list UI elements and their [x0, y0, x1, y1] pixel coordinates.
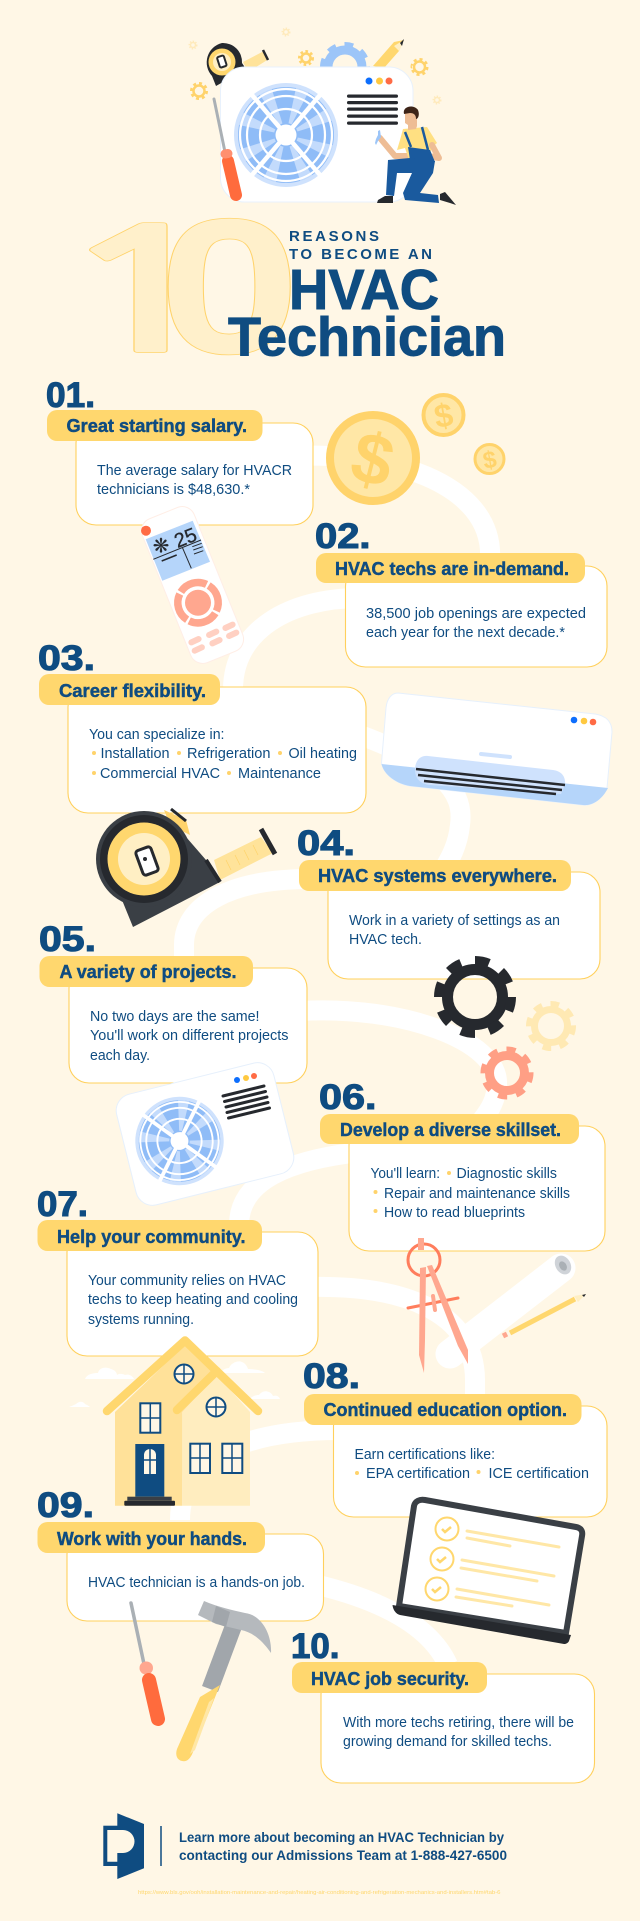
panel: reason 03: You can specialize in:	[89, 726, 224, 743]
icon: large tape measure	[96, 809, 275, 927]
icon: hammer	[176, 1601, 271, 1761]
source url: https://www.bls.gov/ooh/installation-maintenance-and-repair/heating-air-conditioning-and-refrigeration-mechanics-and-installers.htm#tab-6	[138, 1890, 500, 1896]
icon: fan	[234, 83, 338, 187]
panel: reason 02: 38,500 job openings are expected	[366, 605, 586, 622]
panel: reason 08	[303, 1357, 607, 1517]
panel: reason 06: 06.	[319, 1078, 376, 1117]
panel: reason 06: How to read blueprints	[384, 1204, 525, 1221]
panel: reason 05: No two days are the same!	[90, 1008, 260, 1025]
icon: coins: $	[481, 446, 499, 475]
panel: reason 04: HVAC tech.	[349, 931, 422, 948]
panel: reason 05: A variety of projects.	[60, 961, 236, 982]
icon: gears	[439, 961, 573, 1096]
icon: drafting compass	[408, 1238, 468, 1373]
panel: reason 05	[39, 920, 307, 1083]
footer call to action: Learn more about becoming an HVAC Technician by	[179, 1829, 504, 1845]
panel: reason 08: Earn certifications like:	[354, 1446, 495, 1463]
panel: reason 10	[291, 1627, 594, 1783]
panel: reason 04: 04.	[297, 824, 355, 863]
panel: reason 04: Work in a variety of settings as an	[349, 912, 560, 929]
icon: laptop checklist	[392, 1500, 582, 1644]
icon: coins	[330, 395, 504, 504]
title: big 10	[50, 179, 301, 395]
panel: reason 03: Oil heating	[288, 745, 357, 762]
panel: reason 08: EPA certification	[366, 1465, 470, 1482]
panel: reason 01: Great starting salary.	[66, 415, 247, 436]
panel: reason 07: techs to keep heating and cooling	[88, 1291, 298, 1308]
panel: reason 07	[37, 1185, 318, 1356]
title text	[228, 228, 506, 368]
winding white path	[180, 456, 497, 1665]
icon: wall AC unit	[382, 693, 612, 805]
icon: clouds	[69, 1361, 280, 1407]
vent bars	[347, 94, 398, 125]
panel: reason 07: 07.	[37, 1185, 88, 1224]
panel: reason 10: growing demand for skilled techs.	[343, 1733, 552, 1750]
panel: reason 03: Refrigeration	[187, 745, 270, 762]
panel: reason 02: HVAC techs are in-demand.	[335, 558, 569, 579]
icon: screwdriver	[214, 99, 236, 195]
panel: reason 06: Repair and maintenance skills	[384, 1185, 570, 1202]
panel: reason 07: Help your community.	[57, 1226, 246, 1247]
footer divider	[160, 1826, 162, 1866]
icon: coins: $	[343, 416, 402, 504]
title text: TO BECOME AN	[289, 246, 432, 263]
panel: reason 09: HVAC technician is a hands-on job.	[88, 1574, 305, 1591]
panel: reason 02: each year for the next decade.*	[366, 624, 565, 641]
panel: reason 05: 05.	[39, 920, 96, 959]
panel: reason 06: Diagnostic skills	[456, 1165, 557, 1182]
status lights	[366, 78, 392, 84]
title text: HVAC	[289, 258, 439, 322]
panel: reason 10: With more techs retiring, there will be	[343, 1714, 574, 1731]
panel: reason 03: 03.	[38, 639, 95, 678]
icon: outdoor AC unit	[220, 67, 413, 202]
title text: Technician	[228, 306, 506, 368]
panel: reason 04	[297, 824, 600, 979]
icon: pencil	[503, 1294, 586, 1336]
panel: reason 08: 08.	[303, 1357, 360, 1396]
icon: pencil	[373, 39, 404, 68]
icon: technician	[375, 107, 456, 205]
panel: reason 06: Develop a diverse skillset.	[340, 1119, 561, 1140]
panel: reason 03: Maintenance	[238, 765, 321, 782]
panel: reason 02	[315, 517, 607, 667]
panel: reason 05: You'll work on different projects	[90, 1027, 288, 1044]
panel: reason 04: HVAC systems everywhere.	[318, 865, 557, 886]
icon: remote control: ❋	[153, 536, 169, 558]
panel: reason 01: technicians is $48,630.*	[97, 481, 250, 498]
icon: small gears	[190, 28, 440, 104]
icon: screwdriver	[131, 1603, 158, 1719]
panel: reason 09	[37, 1486, 324, 1621]
panel: reason 03: Commercial HVAC	[100, 765, 220, 782]
panel: reason 05: each day.	[90, 1047, 150, 1064]
panel: reason 09: Work with your hands.	[57, 1528, 247, 1549]
icon: house	[107, 1340, 258, 1506]
footer logo	[103, 1813, 144, 1879]
icon: tape measure small	[207, 43, 269, 86]
panel: reason 10: 10.	[291, 1627, 340, 1666]
icon: remote control	[138, 503, 247, 667]
icon: remote control: 25	[171, 524, 200, 553]
panel: reason 07: systems running.	[88, 1311, 194, 1328]
icon: tilted outdoor AC unit	[113, 1059, 297, 1209]
hero illustration	[190, 28, 456, 205]
panel: reason 01: The average salary for HVACR	[97, 462, 292, 479]
panel: reason 06: You'll learn:	[370, 1165, 440, 1182]
panel: reason 08: ICE certification	[488, 1465, 589, 1482]
panel: reason 06	[319, 1078, 605, 1251]
panel: reason 03	[38, 639, 366, 813]
panel: reason 02: 02.	[315, 517, 370, 556]
panel: reason 01: 01.	[46, 376, 95, 415]
icon: blueprint roll	[450, 1253, 574, 1354]
panel: reason 09: 09.	[37, 1486, 94, 1525]
icon: coins: $	[431, 396, 456, 435]
icon: blue gear	[323, 45, 367, 89]
footer call to action: contacting our Admissions Team at 1-888-427-6500	[179, 1847, 507, 1863]
title: big 10: 0	[158, 179, 301, 395]
panel: reason 08: Continued education option.	[324, 1399, 567, 1420]
panel: reason 01	[46, 376, 313, 525]
title text: REASONS	[289, 228, 379, 245]
panel: reason 03: Career flexibility.	[59, 680, 206, 701]
panel: reason 03: Installation	[100, 745, 170, 762]
panel: reason 10: HVAC job security.	[311, 1668, 469, 1689]
title: big 10: 1	[50, 209, 237, 378]
footer call to action	[179, 1829, 507, 1863]
panel: reason 07: Your community relies on HVAC	[88, 1272, 286, 1289]
